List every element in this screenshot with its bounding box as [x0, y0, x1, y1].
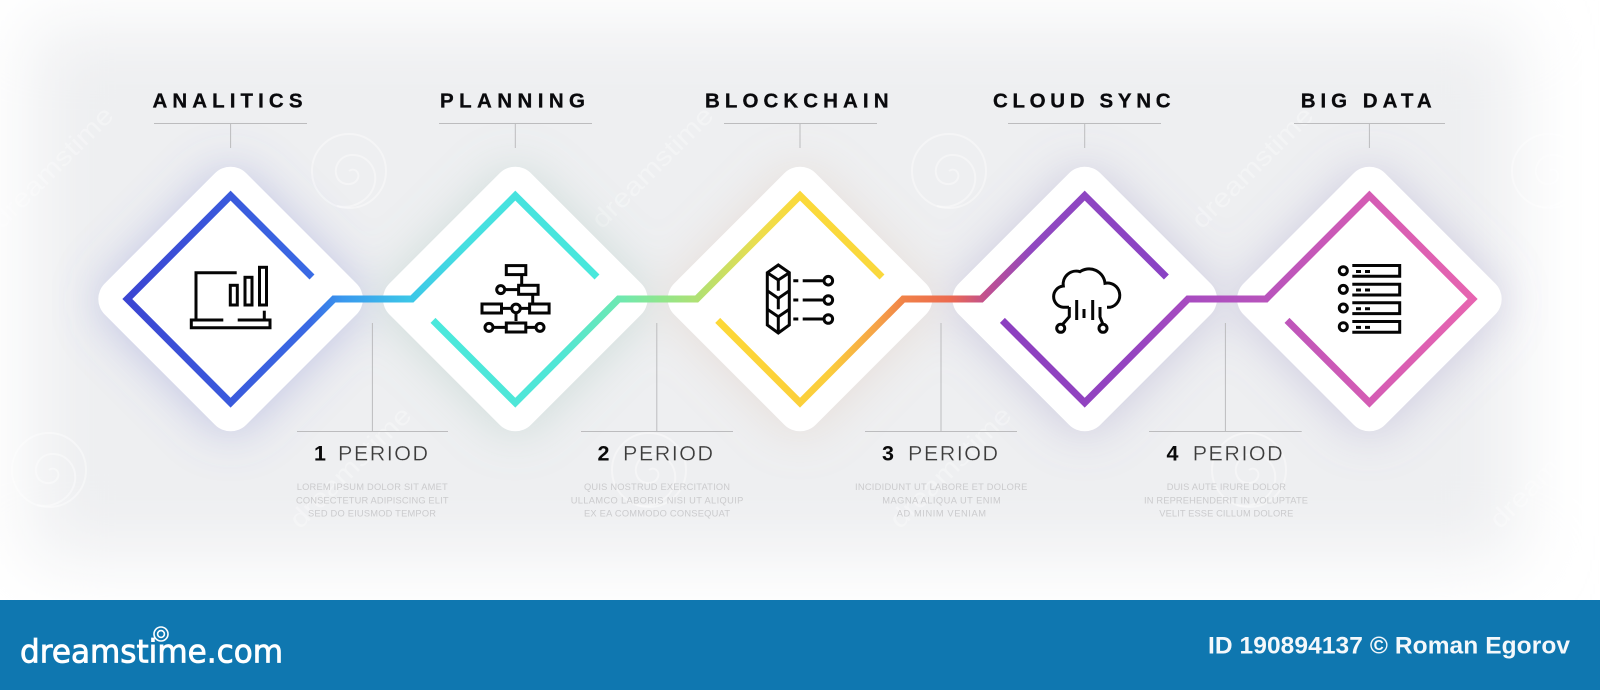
panel: cloud sync diamond	[943, 158, 1226, 440]
period 2 description: EX EA COMMODO CONSEQUAT	[584, 509, 730, 519]
period 2 description: ULLAMCO LABORIS NISI UT ALIQUIP	[571, 495, 743, 505]
heading: blockchain: BLOCKCHAIN	[705, 89, 888, 112]
watermark: spirals	[12, 134, 1586, 507]
watermark: diagonal text: dreamstime	[1185, 100, 1319, 234]
watermark: diagonal text: dreamstime	[1483, 400, 1600, 534]
icon: laptop with bar chart	[191, 267, 270, 328]
period 1 label: PERIOD	[338, 442, 428, 466]
panel: analytics diamond	[89, 158, 372, 440]
icon: blockchain cubes	[767, 265, 833, 333]
period 1 description	[296, 482, 449, 519]
period 1 label: 1	[314, 442, 326, 466]
period 3 description: INCIDIDUNT UT LABORE ET DOLORE	[855, 482, 1027, 492]
period 4 description: IN REPREHENDERIT IN VOLUPTATE	[1144, 495, 1308, 505]
period 1 description: SED DO EIUSMOD TEMPOR	[308, 509, 436, 519]
timeline line: blockchain to cloud sync	[718, 196, 1166, 403]
period 2 label: PERIOD	[623, 442, 713, 466]
footer credit: ID 190894137 © Roman Egorov	[1208, 632, 1570, 659]
watermark: diagonal text: dreamstime	[883, 400, 1017, 534]
watermark: diagonal text	[0, 100, 1600, 534]
panel: blockchain diamond	[659, 158, 941, 440]
watermark: diagonal text: dreamstime	[283, 400, 417, 534]
period 3 description: AD MINIM VENIAM	[897, 509, 986, 519]
period 3 label: 3	[882, 442, 894, 466]
heading: analitics: ANALITICS	[152, 89, 302, 112]
icon: server rows	[1339, 266, 1400, 332]
period 3 description	[855, 482, 1027, 519]
panel: big data diamond	[1228, 158, 1511, 440]
period 4 description	[1144, 482, 1308, 519]
period 2 label: 2	[598, 442, 610, 466]
timeline line: analytics to planning	[127, 196, 597, 403]
period 1 description: CONSECTETUR ADIPISCING ELIT	[296, 495, 449, 505]
period 1 description: LOREM IPSUM DOLOR SIT AMET	[297, 482, 448, 492]
period 2 description	[571, 482, 743, 519]
soft grey backdrop	[30, 25, 1520, 560]
watermark: diagonal text: dreamstime	[585, 100, 719, 234]
footer band	[0, 600, 1600, 690]
icon: cloud with circuits	[1054, 269, 1120, 332]
icon: logo spiral	[154, 627, 168, 641]
timeline line: cloud sync to big data	[1002, 196, 1473, 403]
panel: diamond shadows	[89, 160, 1511, 442]
footer logo: dreamstime.com	[20, 633, 283, 671]
period 4 description: DUIS AUTE IRURE DOLOR	[1167, 482, 1286, 492]
icon: flowchart	[482, 266, 549, 332]
period 4 label: 4	[1166, 442, 1178, 466]
heading: cloud sync: CLOUD SYNC	[993, 89, 1171, 112]
panel: planning diamond	[374, 158, 657, 440]
heading: big data: BIG DATA	[1301, 89, 1432, 112]
period 3 label: PERIOD	[908, 442, 998, 466]
timeline line: planning to blockchain	[433, 196, 882, 403]
period 4 description: VELIT ESSE CILLUM DOLORE	[1159, 509, 1293, 519]
period 4 label: PERIOD	[1193, 442, 1283, 466]
heading: planning: PLANNING	[440, 89, 585, 112]
period 3 description: MAGNA ALIQUA UT ENIM	[882, 495, 1001, 505]
period 2 description: QUIS NOSTRUD EXERCITATION	[584, 482, 730, 492]
